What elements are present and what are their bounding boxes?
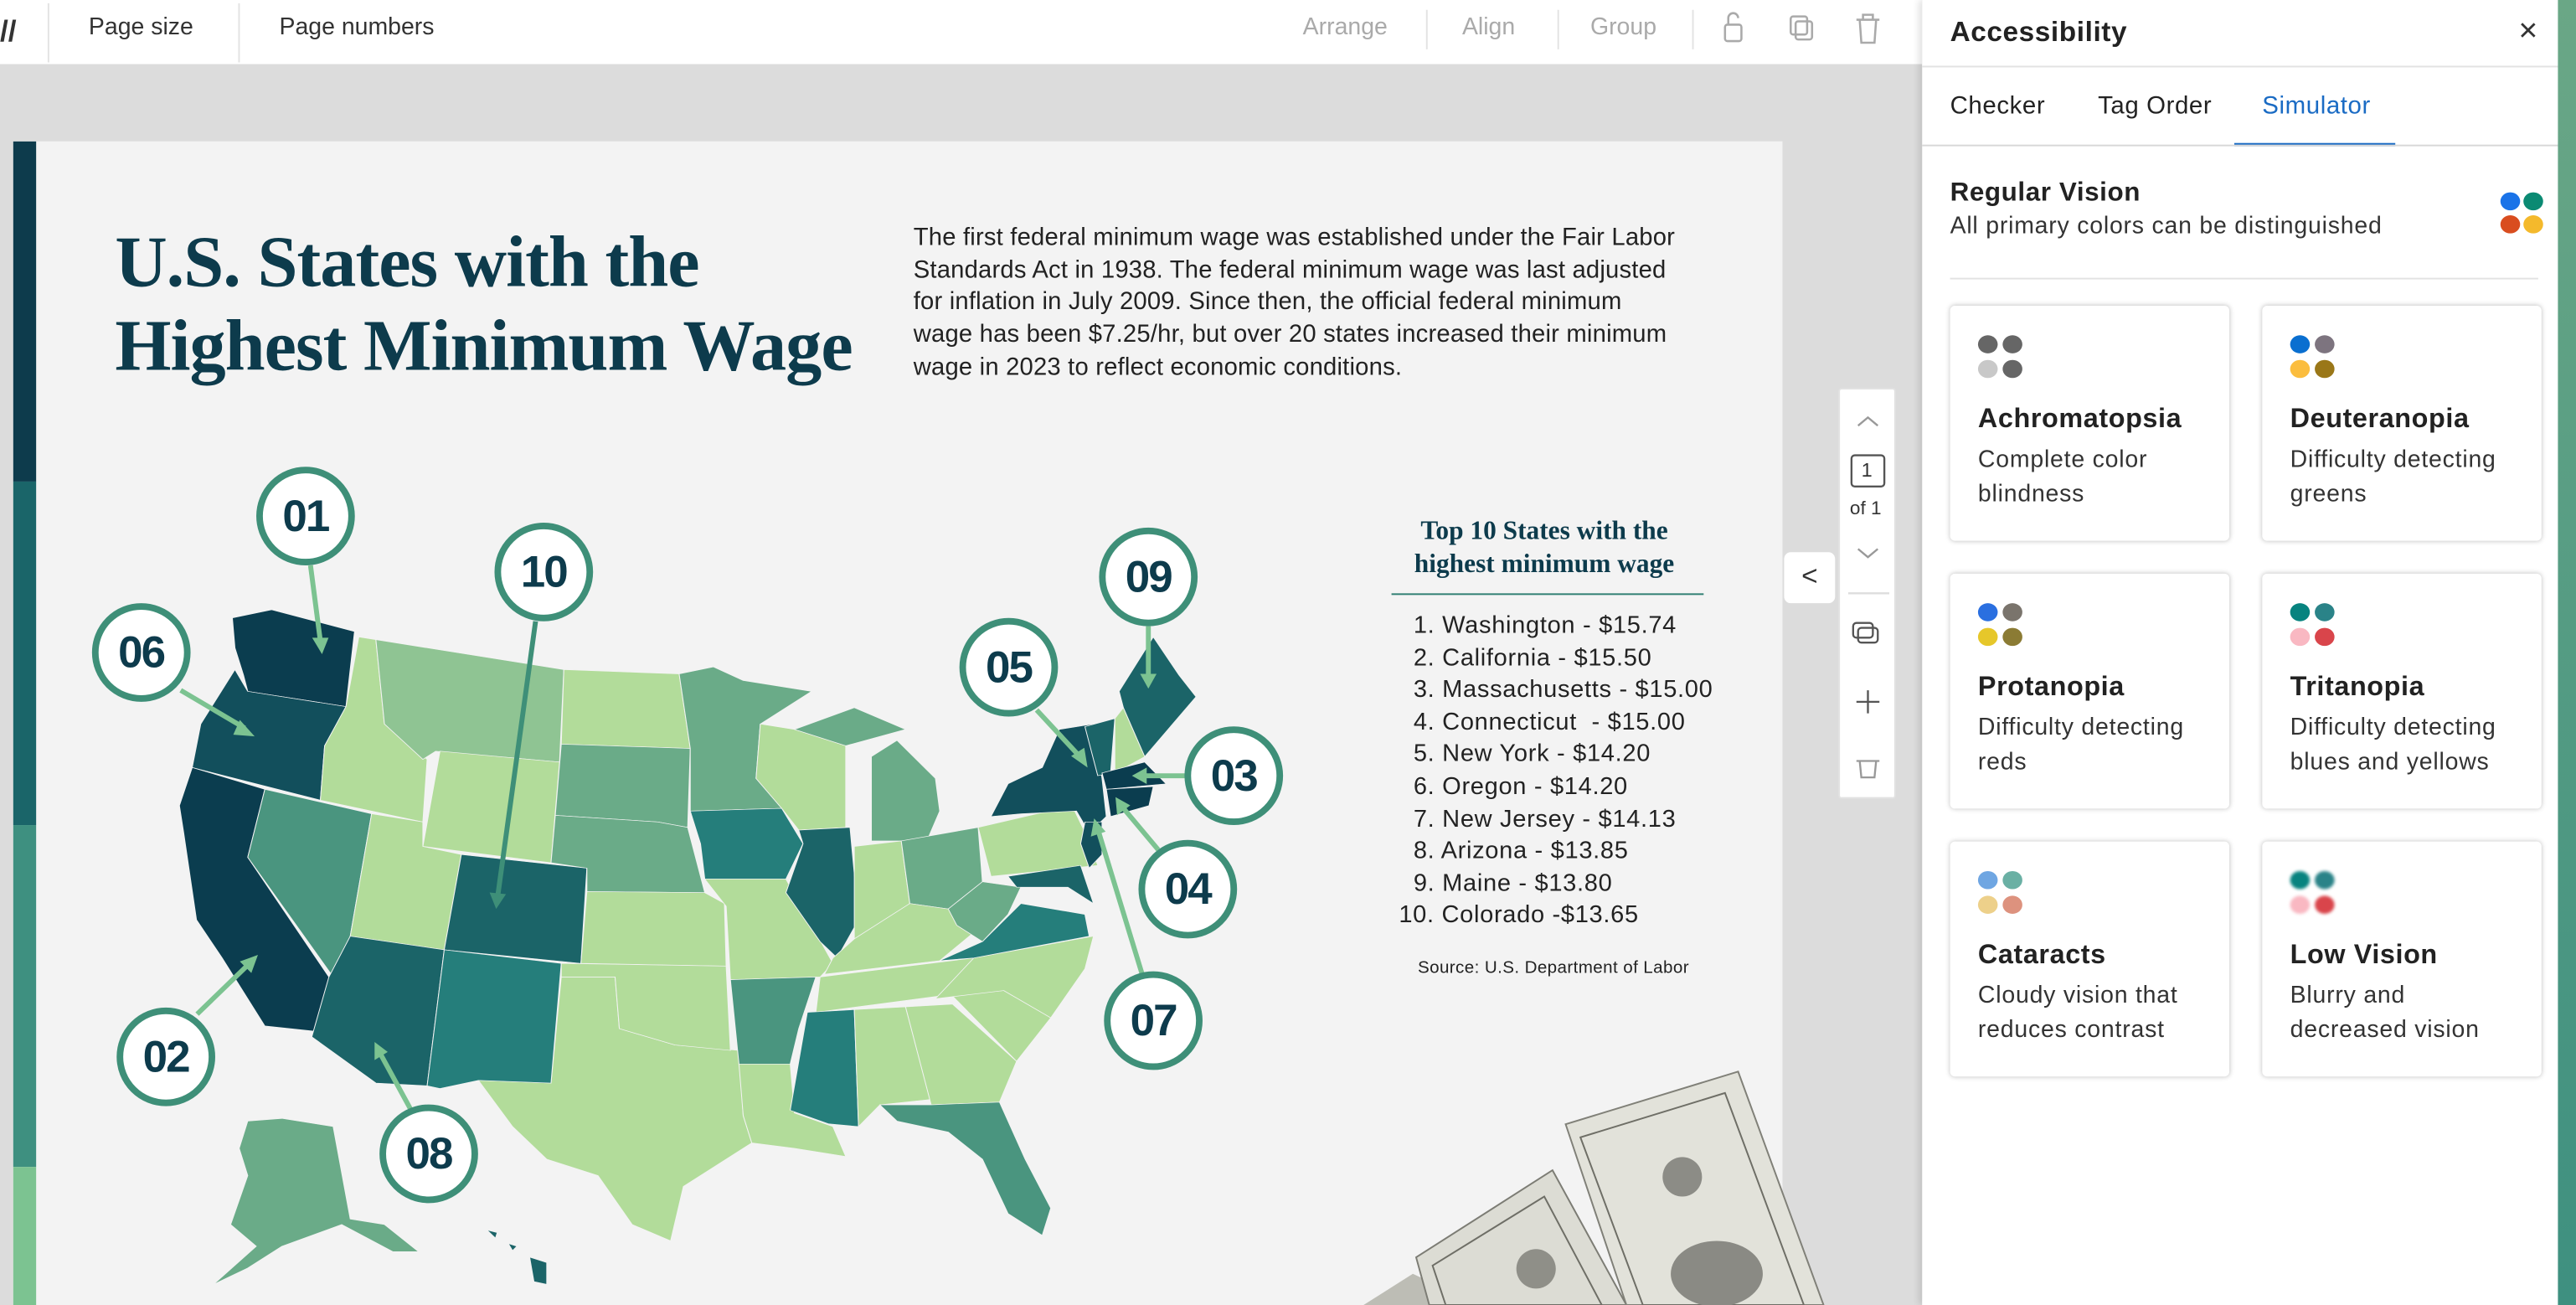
card: protanopia: Protanopia [1978, 673, 2125, 702]
tabs: Checker [1950, 92, 2045, 120]
tabs: Tag Order [2098, 92, 2212, 120]
card: protanopia [1950, 574, 2229, 808]
page navigator: 1 [1862, 458, 1873, 482]
title: Highest Minimum Wage [115, 306, 853, 386]
page navigator [1838, 388, 1896, 799]
source note: Source: U.S. Department of Labor [1418, 958, 1689, 978]
arrow 10 [490, 622, 536, 909]
tabs [1950, 92, 2395, 147]
marker 09: 09 [1126, 551, 1172, 601]
marker 06 [92, 603, 191, 702]
left colour stripe [13, 141, 37, 1305]
menu: page size: Page size [89, 15, 193, 41]
page navigator: of 1 [1850, 500, 1882, 519]
card: cataracts [1950, 842, 2229, 1076]
card: cataracts: Cataracts [1978, 940, 2106, 970]
intro paragraph: for inflation in July 2009. Since then, the official federal minimum [914, 290, 1622, 317]
US map [179, 565, 1196, 1285]
title: U.S. States with the [115, 222, 699, 302]
arrow 04 [1115, 797, 1158, 849]
intro paragraph: The first federal minimum wage was established under the Fair Labor [914, 225, 1675, 251]
marker 08 [379, 1105, 478, 1203]
menu: align: Align [1462, 15, 1515, 41]
card: achromatopsia: Achromatopsia [1978, 405, 2182, 434]
marker 03: 03 [1211, 751, 1257, 800]
marker 01 [256, 467, 355, 565]
card: deuteranopia: Difficulty detecting [2290, 447, 2496, 473]
card: tritanopia [2262, 574, 2542, 808]
collapse button: < [1801, 560, 1818, 591]
arrow 05 [1037, 710, 1088, 767]
card: tritanopia: Difficulty detecting [2290, 715, 2496, 741]
card: tritanopia: blues and yellows [2290, 750, 2490, 776]
intro paragraph: wage in 2023 to reflect economic conditions. [914, 354, 1402, 381]
money photo [1363, 1070, 1824, 1305]
marker 01: 01 [282, 491, 328, 540]
card: cataracts: Cloudy vision that [1978, 983, 2178, 1009]
marker 10: 10 [521, 546, 567, 596]
intro paragraph: Standards Act in 1938. The federal minimum wage was last adjusted [914, 257, 1667, 284]
card: achromatopsia: blindness [1978, 482, 2084, 508]
list heading [1414, 518, 1674, 579]
icons: lock copy delete [1723, 12, 1879, 44]
marker 10 [494, 523, 593, 622]
arrow 09 [1140, 627, 1157, 689]
marker 02: 02 [143, 1031, 189, 1081]
card: protanopia: Difficulty detecting [1978, 715, 2184, 741]
menu: page numbers: Page numbers [279, 15, 435, 41]
marker 08: 08 [405, 1128, 452, 1178]
list heading: highest minimum wage [1414, 550, 1674, 579]
panel title: Accessibility [1950, 17, 2127, 48]
title [115, 222, 853, 386]
icon: toolbar grip: // [0, 15, 17, 48]
top toolbar [0, 0, 1922, 65]
card: achromatopsia [1950, 306, 2229, 541]
marker 02 [116, 1008, 215, 1106]
collapse button [1784, 552, 1835, 603]
page canvas [13, 142, 1782, 1305]
menu: arrange: Arrange [1303, 15, 1388, 41]
card: low vision: Blurry and [2290, 983, 2405, 1009]
marker 09 [1099, 528, 1198, 627]
green edge strip [2558, 0, 2576, 1305]
card: achromatopsia: Complete color [1978, 447, 2147, 473]
regular vision [1950, 179, 2543, 240]
card: low vision: decreased vision [2290, 1018, 2480, 1044]
marker 05: 05 [986, 642, 1032, 691]
card: low vision [2262, 842, 2542, 1076]
marker 04: 04 [1165, 864, 1211, 913]
list heading: Top 10 States with the [1420, 518, 1668, 545]
card: deuteranopia: greens [2290, 482, 2367, 508]
arrow 03 [1132, 767, 1186, 784]
arrow 01 [311, 565, 328, 654]
intro paragraph [913, 225, 1675, 381]
marker 07 [1104, 972, 1203, 1070]
card: cataracts: reduces contrast [1978, 1018, 2165, 1044]
tabs: Simulator [2262, 92, 2371, 120]
card: protanopia: reds [1978, 750, 2027, 776]
arrow 02 [197, 955, 258, 1014]
arrows [181, 565, 1186, 1109]
card: deuteranopia: Deuteranopia [2290, 405, 2470, 434]
arrow 08 [374, 1042, 410, 1109]
marker 05 [960, 618, 1058, 717]
ranked list: 1. Washington - $15.74 2. California - $15.50 3. Massachusetts - $15.00 4. Connecticut - $15.00 5. New York - $14.20 6. Oregon - $14.20 7. New Jersey - $14.13 8. Arizona - $13.85 9. Maine - $13.80 10. Colorado -$13.65 [1392, 613, 1713, 929]
card: low vision: Low Vision [2290, 940, 2438, 970]
marker 04 [1138, 840, 1237, 938]
menu: group: Group [1590, 15, 1656, 41]
regular vision: All primary colors can be distinguished [1950, 214, 2383, 240]
card: deuteranopia [2262, 306, 2542, 541]
close icon: × [2518, 13, 2537, 49]
marker 07: 07 [1131, 995, 1177, 1045]
arrow 06 [181, 690, 255, 736]
marker 06: 06 [118, 627, 164, 676]
marker 03 [1184, 726, 1283, 825]
accessibility panel [1922, 0, 2576, 1305]
intro paragraph: wage has been $7.25/hr, but over 20 states increased their minimum [914, 322, 1667, 348]
arrow 07 [1091, 818, 1141, 973]
card: tritanopia: Tritanopia [2290, 673, 2424, 702]
regular vision: Regular Vision [1950, 179, 2141, 207]
